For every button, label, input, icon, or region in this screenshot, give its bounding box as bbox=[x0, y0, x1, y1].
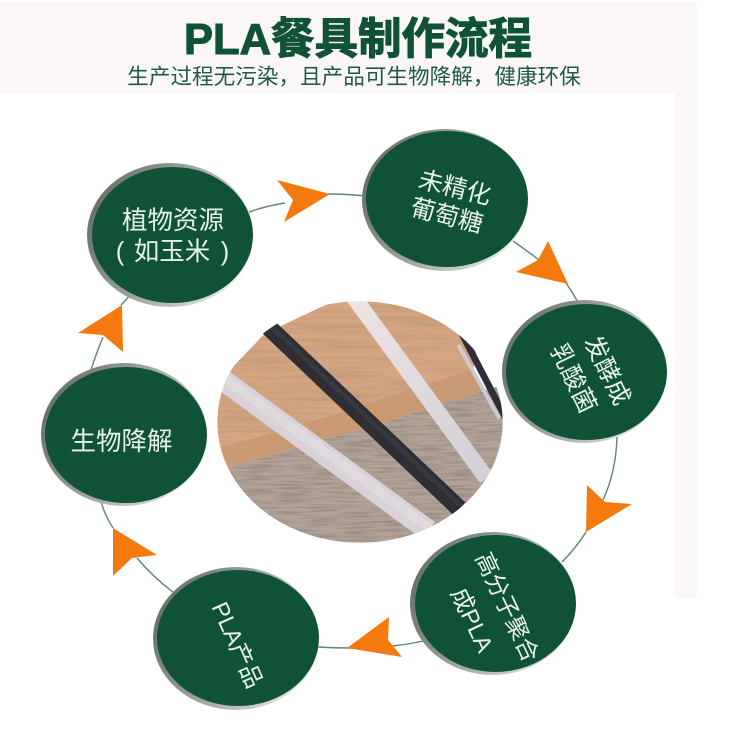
infographic canvas bbox=[41, 16, 667, 710]
dark straw at edge bbox=[462, 333, 507, 420]
black straw bbox=[267, 325, 461, 509]
photo: PLA straws on wood bbox=[217, 301, 503, 543]
circle: unrefined glucose bbox=[362, 129, 528, 271]
subtitle: 生产过程无污染，且产品可生物降解，健康环保 bbox=[127, 64, 581, 89]
circle: unrefined glucose: 葡萄糖 bbox=[408, 193, 486, 238]
arrow: fermentation to polymer bbox=[586, 485, 632, 532]
circle: polymerise into PLA bbox=[410, 532, 576, 675]
circle: fermentation into lactic acid bacteria: 乳酸菌 bbox=[544, 339, 602, 418]
edge clear highlight bbox=[458, 345, 499, 418]
arrow: polymer to product bbox=[347, 617, 402, 657]
clear straw right bbox=[353, 297, 487, 478]
background band bbox=[0, 2, 697, 598]
circle: plant resources: ( bbox=[116, 238, 125, 266]
arrow: product to biodegradation bbox=[113, 528, 157, 576]
arrow: resources to glucose bbox=[277, 180, 330, 222]
circle: biodegradation bbox=[41, 363, 207, 506]
circle: fermentation into lactic acid bacteria: 发酵成 bbox=[578, 331, 636, 410]
circle: plant resources bbox=[87, 163, 253, 307]
circle: fermentation into lactic acid bacteria bbox=[502, 300, 667, 443]
circle: plant resources: 植物资源 bbox=[122, 207, 224, 235]
circle: polymerise into PLA: 高分子聚合 bbox=[470, 548, 544, 666]
grey wood base bbox=[228, 387, 503, 543]
arrow: biodegradation to resources bbox=[78, 305, 123, 352]
circle: plant resources: ) bbox=[221, 238, 229, 266]
circle: PLA product: PLA产品 bbox=[207, 598, 267, 692]
arrow: glucose to fermentation bbox=[516, 241, 568, 284]
circle: unrefined glucose: 未精化 bbox=[416, 165, 494, 210]
wood block top face bbox=[217, 301, 476, 446]
connector lines bbox=[90, 194, 617, 648]
clear straw left bbox=[222, 378, 430, 531]
circle: PLA product bbox=[153, 567, 319, 710]
circle: biodegradation: 生物降解 bbox=[70, 428, 173, 456]
wood block front face bbox=[220, 370, 482, 468]
circle: plant resources: 如玉米 bbox=[134, 238, 210, 266]
title: PLA餐具制作流程 bbox=[184, 16, 532, 64]
circle: polymerise into PLA: 成PLA bbox=[446, 584, 498, 657]
